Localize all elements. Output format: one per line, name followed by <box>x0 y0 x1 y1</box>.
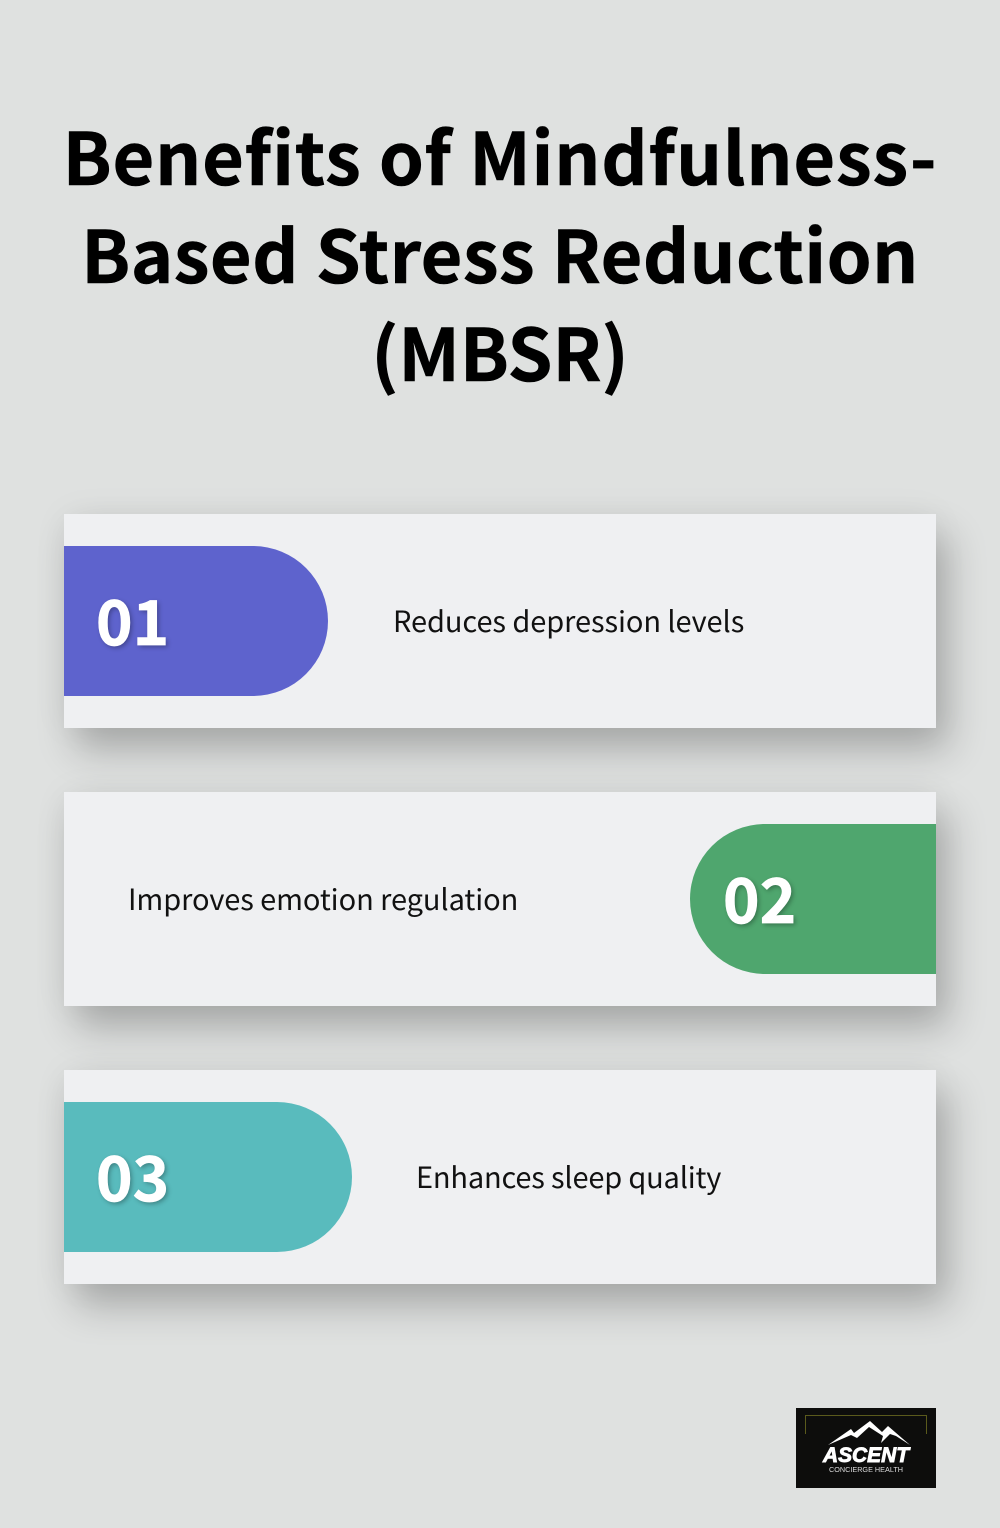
title: Based Stress Reduction <box>81 199 919 304</box>
number badge 01: 01 <box>96 573 169 663</box>
title: Benefits of Mindfulness- <box>63 101 937 206</box>
number badge 02 <box>690 824 936 974</box>
title <box>63 101 937 402</box>
text: benefit 02: Improves emotion regulation <box>128 877 518 919</box>
text: benefit 01: Reduces depression levels <box>393 599 744 641</box>
panel: benefit 03 <box>64 1070 936 1284</box>
title: (MBSR) <box>371 297 629 402</box>
number badge 02: 02 <box>723 851 796 941</box>
number badge 03: 03 <box>96 1129 169 1219</box>
text: benefit 03: Enhances sleep quality <box>416 1155 721 1197</box>
logo: Ascent Concierge Health: ASCENT <box>822 1444 911 1467</box>
number badge 01 <box>64 546 328 696</box>
panel: benefit 01 <box>64 514 936 728</box>
logo: Ascent Concierge Health <box>796 1408 936 1488</box>
number badge 03 <box>64 1102 352 1252</box>
logo: Ascent Concierge Health: CONCIERGE HEALTH <box>829 1465 903 1474</box>
panel: benefit 02 <box>64 792 936 1006</box>
